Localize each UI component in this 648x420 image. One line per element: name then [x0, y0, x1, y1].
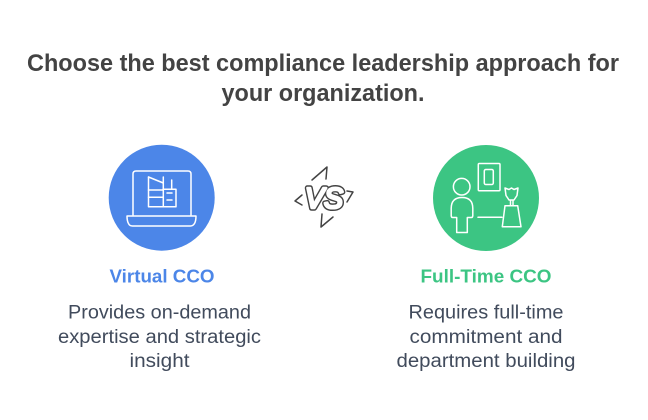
heading: Virtual CCO: Virtual CCO [110, 266, 214, 286]
text: virtual CCO description: insight [130, 351, 190, 372]
icon: versus: VS [305, 183, 344, 215]
text: full-time CCO description: commitment and [410, 327, 562, 348]
text: full-time CCO description: department building [396, 351, 576, 372]
icon: laptop with buildings [109, 145, 215, 251]
icon: versus [295, 167, 353, 227]
panel: virtual CCO [58, 145, 261, 372]
text: virtual CCO description: expertise and strategic [58, 327, 261, 348]
panel: full-time CCO [396, 145, 576, 372]
icon: versus: VS [305, 183, 344, 215]
title: Choose the best compliance leadership approach for [27, 50, 619, 77]
text: full-time CCO description: Requires full-time [408, 302, 564, 324]
title [27, 50, 619, 107]
text: full-time CCO description [396, 302, 576, 372]
text: virtual CCO description: Provides on-demand [68, 302, 251, 324]
heading: Full-Time CCO: Full-Time CCO [420, 266, 552, 286]
title: your organization. [222, 80, 424, 107]
icon: person with frame and desk [433, 145, 539, 251]
text: virtual CCO description [58, 302, 261, 372]
